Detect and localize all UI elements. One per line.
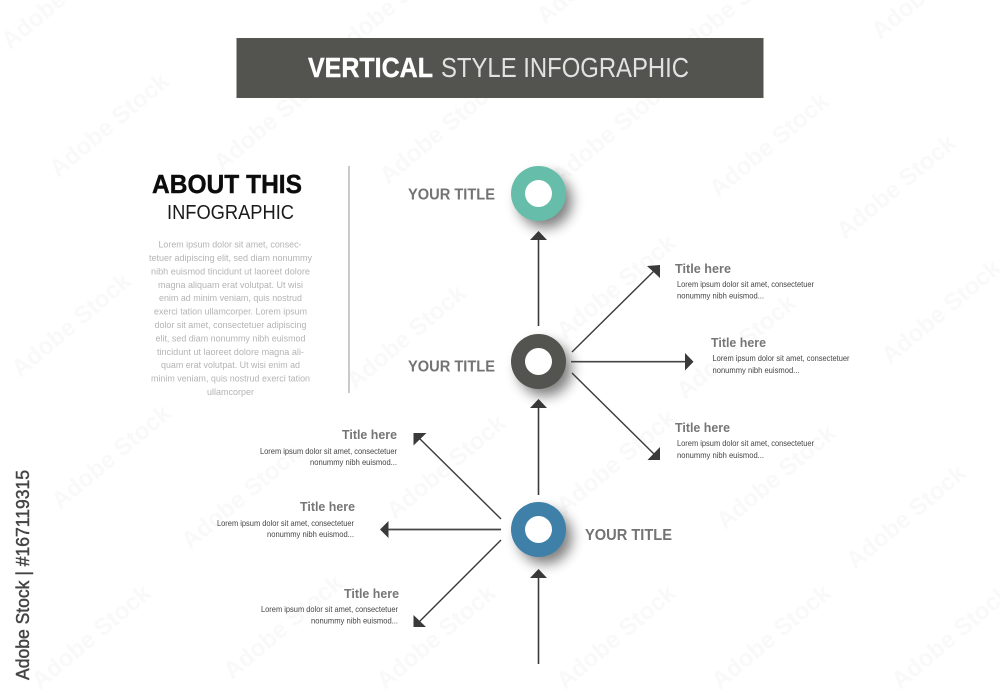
watermark: Adobe Stock [342, 279, 472, 395]
watermark: Adobe Stock [712, 419, 842, 535]
title banner [236, 38, 764, 98]
text block: right upper: Lorem ipsum dolor sit amet, consectetuer [677, 279, 814, 289]
watermark: Adobe Stock [547, 74, 677, 190]
text block: left lower [261, 586, 399, 626]
body text: enim ad minim veniam, quis nostrud [159, 293, 302, 304]
body text: tincidunt ut laoreet dolore magna ali- [157, 347, 304, 358]
watermark: Adobe Stock [552, 404, 682, 520]
watermark: Adobe Stock [705, 87, 835, 203]
watermark: Adobe Stock [372, 579, 502, 695]
text block: left lower: nonummy nibh euismod... [311, 616, 398, 626]
body text: quam erat volutpat. Ut wisi enim ad [161, 360, 300, 371]
watermark: Adobe Stock [47, 399, 177, 515]
panel: about this infographic [149, 169, 312, 398]
watermark: Adobe Stock [209, 61, 339, 177]
text block: right upper: nonummy nibh euismod... [677, 290, 764, 300]
node: grey circle [511, 334, 572, 396]
body text: magna aliquam erat volutpat. Ut wisi [158, 280, 303, 291]
watermark: Adobe Stock [552, 229, 682, 345]
body text: dolor sit amet, consectetuer adipiscing [154, 320, 306, 331]
body text: ullamcorper [207, 387, 254, 398]
watermark: Adobe Stock [7, 267, 137, 383]
arrow: left upper [414, 433, 501, 519]
label: your title bottom: YOUR TITLE [585, 527, 672, 544]
label: your title middle: YOUR TITLE [408, 359, 495, 376]
watermark: Adobe Stock [552, 579, 682, 695]
title banner: VERTICAL [308, 52, 433, 83]
watermark: Adobe Stock [832, 129, 962, 245]
arrow: up to grey node [530, 399, 547, 495]
watermark: Adobe Stock [842, 459, 972, 575]
watermark: Adobe Stock [672, 289, 802, 405]
stock credit: Adobe Stock | #167119315 [13, 470, 33, 680]
text block: right lower: nonummy nibh euismod... [677, 450, 764, 460]
watermark: Adobe Stock [27, 579, 157, 695]
body text [149, 240, 312, 398]
heading: about this: ABOUT THIS [152, 169, 302, 199]
body text: minim veniam, quis nostrud exerci tation [151, 374, 310, 385]
node: teal circle [511, 166, 572, 228]
arrow: left lower [414, 540, 501, 627]
text block: right middle [711, 335, 850, 375]
body text: exerci tation ullamcorper. Lorem ipsum [154, 307, 307, 318]
text block: left lower: Lorem ipsum dolor sit amet, consectetuer [261, 604, 398, 614]
text block: right upper [675, 261, 814, 300]
arrow: right upper [572, 265, 660, 352]
body text: nibh euismod tincidunt ut laoreet dolore [151, 266, 310, 277]
watermark: Adobe Stock [45, 67, 175, 183]
text block: right middle: Lorem ipsum dolor sit amet, consectetuer [712, 353, 850, 363]
arrow: up to teal node [530, 231, 547, 326]
body text: Lorem ipsum dolor sit amet, consec- [158, 240, 302, 250]
arrow: right lower [572, 373, 660, 460]
title banner: STYLE INFOGRAPHIC [441, 52, 689, 83]
text block: left upper: Title here [342, 427, 397, 442]
watermark: Adobe Stock [177, 439, 307, 555]
text block: left upper [260, 427, 397, 467]
text block: left lower: Title here [344, 586, 399, 601]
watermark: Adobe Stock [375, 74, 505, 190]
text block: right middle: nonummy nibh euismod... [712, 365, 800, 375]
label: your title top: YOUR TITLE [408, 186, 495, 204]
watermark: Adobe Stock [219, 569, 349, 685]
text block: left middle: Lorem ipsum dolor sit amet, consectetuer [217, 518, 354, 528]
body text: elit, sed diam nonummy nibh euismod [156, 333, 306, 344]
text block: right upper: Title here [675, 261, 731, 276]
subheading: infographic: INFOGRAPHIC [167, 202, 294, 224]
text block: left middle: Title here [300, 499, 355, 514]
arrow: left middle [380, 521, 501, 538]
watermark: Adobe Stock [382, 409, 512, 525]
arrow: right middle [571, 353, 694, 370]
arrow: up to blue node [530, 569, 547, 664]
text block: right lower: Lorem ipsum dolor sit amet, consectetuer [677, 438, 814, 448]
text block: left middle: nonummy nibh euismod... [267, 529, 354, 539]
text block: right lower: Title here [675, 420, 730, 435]
text block: right lower [675, 420, 814, 460]
text block: left upper: nonummy nibh euismod... [310, 457, 397, 467]
node: blue circle [511, 502, 572, 564]
watermark: Adobe Stock [707, 579, 837, 695]
text block: left middle [217, 499, 355, 539]
body text: tetuer adipiscing elit, sed diam nonummy [149, 253, 312, 264]
text block: right middle: Title here [711, 335, 766, 350]
text block: left upper: Lorem ipsum dolor sit amet, consectetuer [260, 446, 397, 456]
